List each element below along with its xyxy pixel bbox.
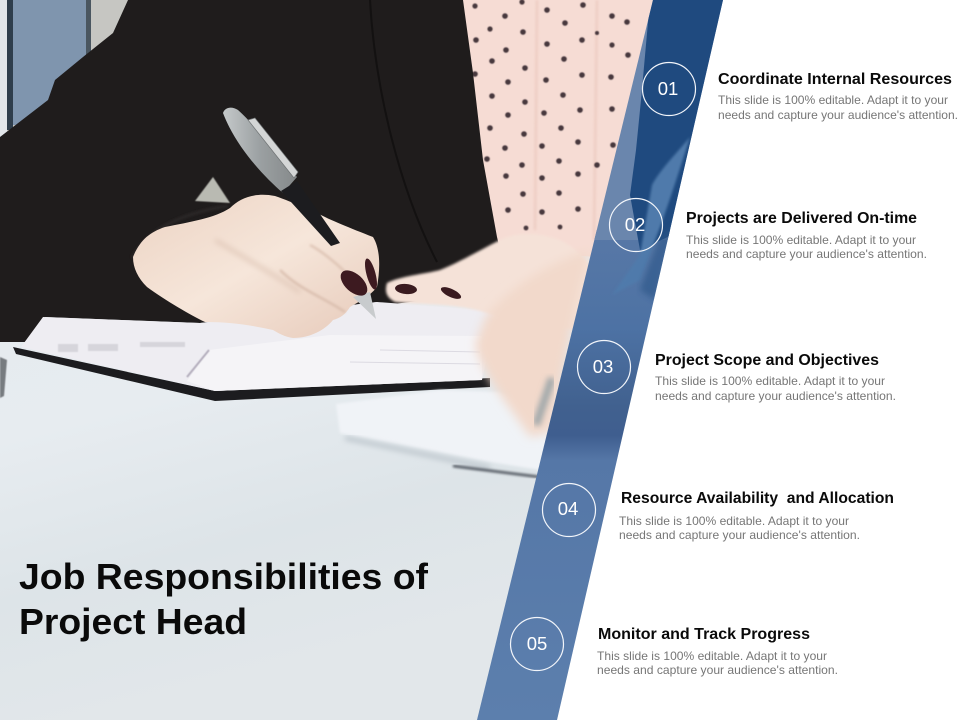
heading and description 02: Projects are Delivered On-time xyxy=(686,210,917,227)
left edge pen fragment xyxy=(0,357,7,398)
photo: woman writing in a notebook xyxy=(0,0,720,720)
heading and description 04: This slide is 100% editable. Adapt it to your xyxy=(619,514,849,528)
dark shadow line beside the band xyxy=(453,466,540,477)
title: Job Responsibilities of xyxy=(19,556,429,597)
heading and description 03: Project Scope and Objectives xyxy=(655,352,879,369)
second hand xyxy=(386,234,592,330)
heading and description 04 xyxy=(619,490,894,542)
writing hand xyxy=(133,195,379,338)
pen xyxy=(223,108,376,319)
blurred paper on the desk xyxy=(336,390,575,470)
heading and description 02: needs and capture your audience's attention. xyxy=(686,247,927,261)
number badge 03: 03 xyxy=(593,356,613,377)
blurred pen xyxy=(536,378,552,425)
title xyxy=(19,556,429,642)
heading and description 05: This slide is 100% editable. Adapt it to your xyxy=(597,649,827,663)
notebook xyxy=(13,302,497,401)
number badge 01: 01 xyxy=(658,78,678,99)
heading and description 03 xyxy=(655,352,896,403)
paper shadow on the table xyxy=(345,438,490,468)
blurred foreground hand xyxy=(475,250,590,437)
jacket lapel line xyxy=(370,0,437,262)
heading and description 05 xyxy=(597,626,838,677)
number badge 02 xyxy=(610,198,662,252)
number badge 02: 02 xyxy=(625,214,645,235)
heading and description 03: This slide is 100% editable. Adapt it to your xyxy=(655,374,885,388)
window background xyxy=(0,0,140,150)
heading and description 01: This slide is 100% editable. Adapt it to your xyxy=(718,93,948,107)
heading and description 01: needs and capture your audience's attention. xyxy=(718,108,958,122)
heading and description 04: Resource Availability and Allocation xyxy=(621,490,894,507)
blouse with polka dots xyxy=(460,0,660,260)
heading and description 02 xyxy=(686,210,927,261)
heading and description 02: This slide is 100% editable. Adapt it to your xyxy=(686,233,916,247)
step 01 xyxy=(642,62,958,122)
title: Project Head xyxy=(19,601,247,642)
jacket xyxy=(0,0,510,342)
number badge 04 xyxy=(542,484,596,536)
number badge 01 xyxy=(642,62,696,116)
diagonal blue band xyxy=(470,0,730,720)
step 04 xyxy=(542,484,894,542)
number badge 04: 04 xyxy=(558,498,578,519)
painted fingernails xyxy=(336,257,379,300)
number badge 05 xyxy=(510,618,564,670)
heading and description 03: needs and capture your audience's attention. xyxy=(655,389,896,403)
step 02 xyxy=(610,198,927,261)
number badge 05: 05 xyxy=(527,633,547,654)
step 05 xyxy=(510,618,838,677)
cuff shadow on the sleeve xyxy=(132,206,228,258)
step 03 xyxy=(578,340,896,403)
white right background xyxy=(557,0,960,720)
heading and description 05: Monitor and Track Progress xyxy=(598,626,810,643)
heading and description 01 xyxy=(718,71,958,122)
heading and description 01: Coordinate Internal Resources xyxy=(718,71,952,88)
gap under the arm xyxy=(195,177,230,203)
heading and description 05: needs and capture your audience's attention. xyxy=(597,663,838,677)
heading and description 04: needs and capture your audience's attention. xyxy=(619,528,860,542)
number badge 03 xyxy=(578,340,630,394)
